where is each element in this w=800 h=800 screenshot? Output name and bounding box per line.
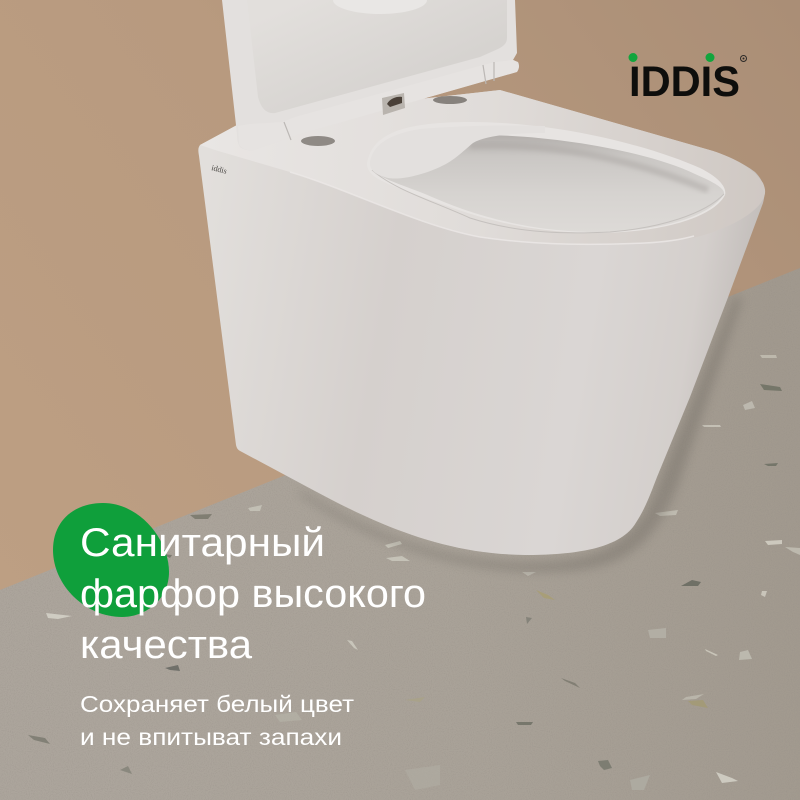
- heading: фарфор высокого: [80, 572, 426, 616]
- toilet shadow: [300, 295, 742, 572]
- hinge bar: [238, 60, 519, 150]
- heading: Санитарный: [80, 521, 325, 565]
- bowl back shading: [470, 145, 708, 190]
- hinge latch: [382, 93, 405, 115]
- rim top surface: [200, 90, 765, 244]
- bowl nozzle shelf: [370, 125, 545, 179]
- subheading: и не впитыват запахи: [80, 724, 342, 750]
- brand mark on toilet: iddis: [211, 163, 228, 176]
- floor: [0, 268, 800, 800]
- wall: [0, 0, 800, 600]
- toilet body: [198, 90, 765, 555]
- subheading: Сохраняет белый цвет: [80, 691, 355, 717]
- toilet seat lid raised: [222, 0, 519, 150]
- seat hinges: [301, 96, 467, 146]
- terrazzo chips: [28, 355, 800, 790]
- logo IDDIS: IDDIS: [629, 58, 740, 106]
- lid inner panel: [247, 0, 507, 113]
- bowl front outline: [372, 170, 724, 233]
- lid cutout: [333, 0, 427, 14]
- heading: качества: [80, 623, 253, 667]
- heading: [80, 521, 426, 667]
- green blob: [53, 503, 169, 617]
- subheading: [80, 691, 355, 750]
- toilet bowl: [367, 122, 725, 233]
- rim edge highlight: [290, 172, 694, 244]
